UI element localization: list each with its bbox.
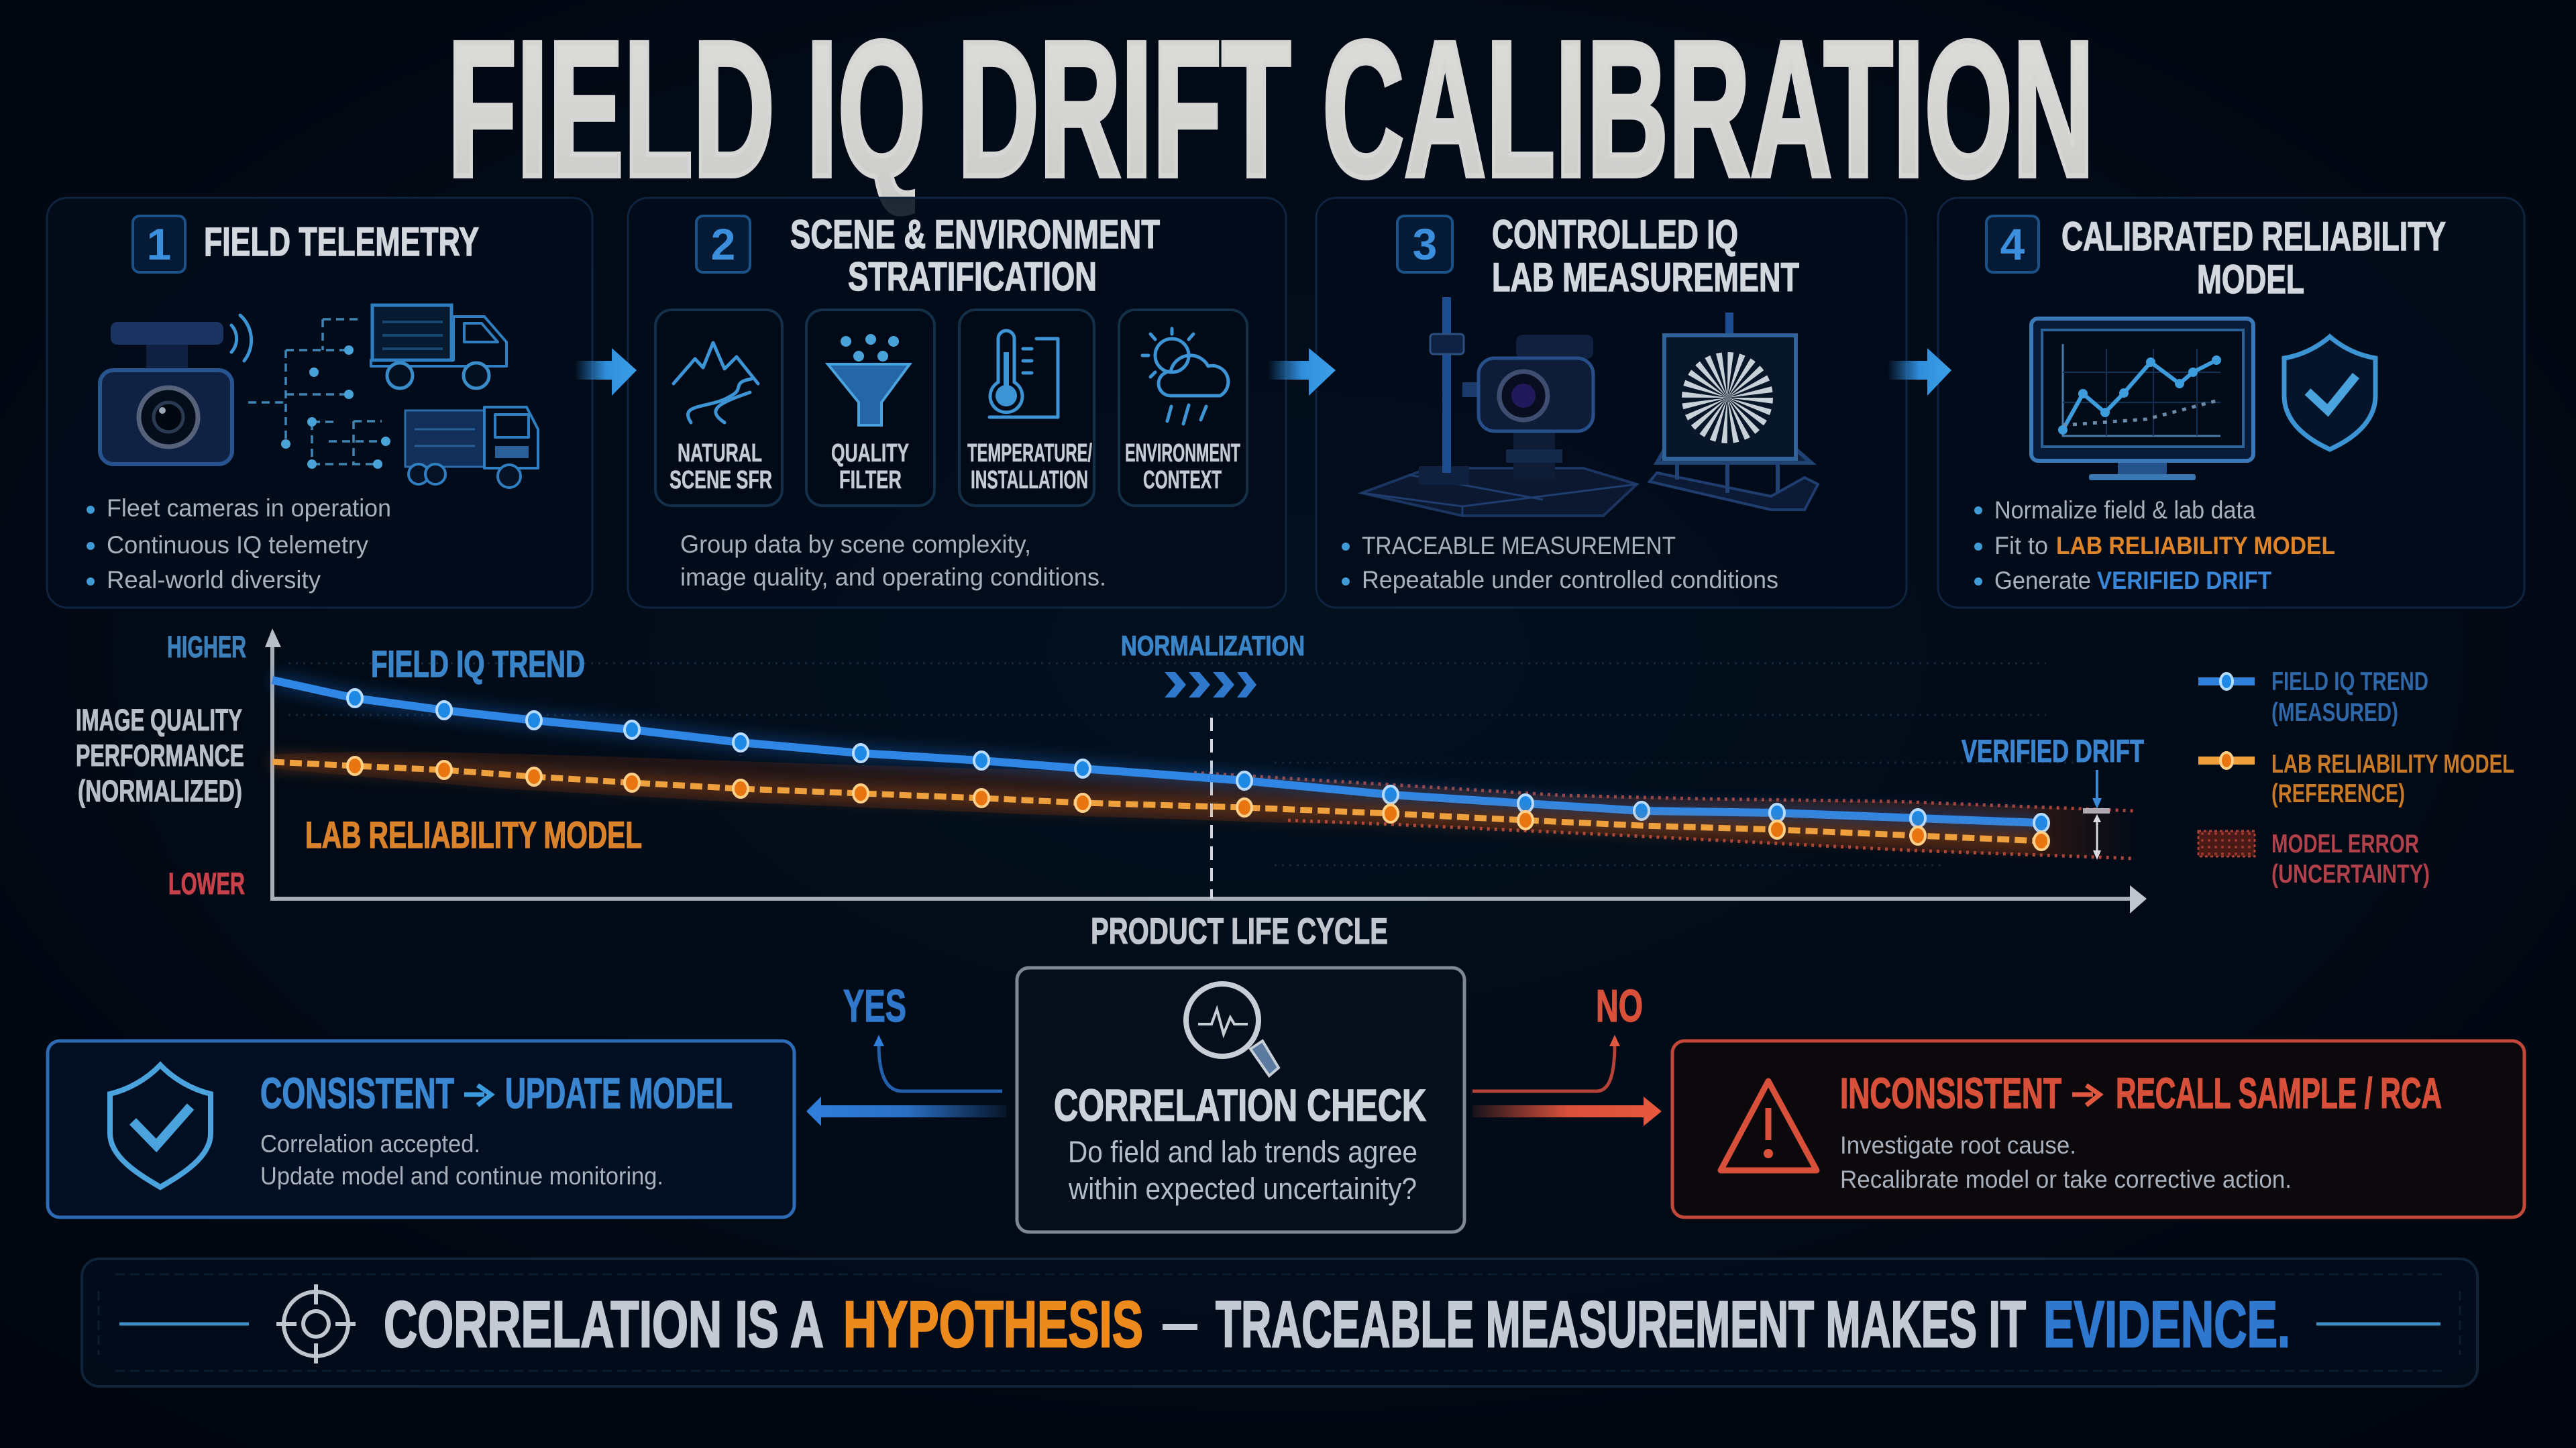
step badge 4: [1986, 216, 2039, 272]
label: yes: YES: [843, 981, 906, 1032]
series label: field IQ trend: FIELD IQ TREND: [371, 643, 585, 685]
callout: verified drift: VERIFIED DRIFT: [1962, 733, 2144, 769]
inconsistent heading: INCONSISTENT: [1840, 1069, 2061, 1117]
bullet list: TRACEABLE MEASUREMENT: [1362, 532, 1676, 559]
panel: scene and environment stratification: [628, 198, 1286, 608]
card: natural scene SFR: [655, 310, 782, 506]
icon: delivery truck: [371, 305, 506, 388]
consistent description: [260, 1130, 663, 1190]
arrow: step 1 to 2: [575, 348, 637, 396]
banner statement: TRACEABLE MEASUREMENT MAKES IT: [1216, 1288, 2026, 1361]
bullet list: Fit to: [1994, 532, 2048, 559]
step badge 1: [133, 216, 185, 272]
icon: resolution target: [1650, 313, 1818, 510]
decision: correlation check: [1017, 968, 1464, 1232]
label: no: NO: [1596, 981, 1643, 1032]
panel: calibrated reliability model: [1938, 198, 2524, 608]
banner statement: HYPOTHESIS: [843, 1288, 1143, 1361]
bullet list: [1342, 532, 1778, 594]
y axis labels: [76, 630, 246, 901]
icon: shield check: [110, 1065, 211, 1187]
consistent description: Update model and continue monitoring.: [260, 1162, 663, 1190]
description text: Group data by scene complexity,: [680, 531, 1031, 558]
normalization label and chevrons: NORMALIZATION: [1121, 630, 1305, 661]
right rule: [2316, 1323, 2440, 1325]
step badge 2: 2: [711, 219, 735, 269]
card: environment context: ENVIRONMENT: [1125, 439, 1240, 467]
card: temperature and installation: [959, 310, 1094, 506]
decision heading: CORRELATION CHECK: [1054, 1080, 1426, 1131]
legend: model error: MODEL ERROR: [2271, 830, 2419, 858]
y axis labels: (NORMALIZED): [78, 774, 242, 808]
arrow: step 2 to 3: [1268, 348, 1336, 396]
legend: lab reliability model: [2198, 750, 2514, 808]
axis title: product life cycle: PRODUCT LIFE CYCLE: [1091, 910, 1388, 952]
legend: field IQ trend: FIELD IQ TREND: [2271, 667, 2428, 696]
icon: dash camera: [100, 315, 252, 464]
arrow: no branch up: [1472, 1035, 1620, 1091]
arrow: step 3 to 4: [1888, 348, 1951, 396]
bullet list: [87, 494, 391, 594]
normalization divider: [1210, 718, 1213, 899]
heading: field telemetry: FIELD TELEMETRY: [204, 219, 479, 264]
bullet list: VERIFIED DRIFT: [2097, 567, 2271, 594]
heading: reliability model: MODEL: [2197, 257, 2304, 302]
card: temperature and installation: INSTALLATION: [971, 466, 1088, 494]
step badge 2: [696, 216, 750, 272]
bullet list: Repeatable under controlled conditions: [1362, 566, 1778, 594]
inconsistent description: Recalibrate model or take corrective action.: [1840, 1166, 2292, 1193]
card: quality filter: QUALITY: [831, 439, 909, 467]
heading: reliability model: [2061, 214, 2446, 302]
field IQ trend line: [272, 680, 2049, 832]
bullet list: Fleet cameras in operation: [107, 494, 391, 522]
y axis labels: IMAGE QUALITY: [76, 703, 242, 737]
legend: [2198, 667, 2514, 889]
consistent heading: UPDATE MODEL: [505, 1069, 733, 1117]
description text: image quality, and operating conditions.: [680, 563, 1106, 591]
icon: camera on test bench: [1362, 297, 1637, 516]
heading: stratification: SCENE & ENVIRONMENT: [790, 212, 1160, 257]
heading: lab measurement: [1492, 212, 1799, 300]
heading: lab measurement: LAB MEASUREMENT: [1492, 255, 1799, 300]
lab reliability model line: [272, 757, 2049, 850]
step badge 4: 4: [2000, 219, 2025, 269]
normalization label and chevrons: [1121, 630, 1305, 698]
card: natural scene SFR: SCENE SFR: [669, 466, 772, 494]
step badge 3: 3: [1413, 219, 1437, 269]
decision question: within expected uncertainity?: [1068, 1172, 1417, 1206]
y axis labels: PERFORMANCE: [76, 738, 244, 773]
card: natural scene SFR: NATURAL: [678, 439, 762, 467]
heading: stratification: [790, 212, 1160, 299]
outcome: inconsistent: [1672, 1041, 2524, 1217]
bullet list: Real-world diversity: [107, 566, 321, 594]
bullet list: [1974, 496, 2335, 594]
icon: connection network: [248, 319, 390, 469]
legend: field IQ trend: [2198, 667, 2428, 727]
axes: [265, 628, 2147, 913]
icon: monitor with chart: [2031, 319, 2253, 480]
heading: reliability model: CALIBRATED RELIABILITY: [2061, 214, 2446, 259]
legend: model error: [2198, 830, 2430, 889]
card: environment context: CONTEXT: [1143, 466, 1222, 494]
icon: target reticle: [276, 1284, 356, 1363]
step badge 3: [1397, 216, 1452, 272]
consistent heading: CONSISTENT: [260, 1069, 454, 1117]
series label: lab reliability model: LAB RELIABILITY MODEL: [305, 814, 642, 856]
icon: magnifier with pulse: [1186, 984, 1279, 1076]
arrow: yes branch up: [873, 1035, 1002, 1091]
banner statement: [384, 1288, 2290, 1361]
card: quality filter: FILTER: [839, 466, 902, 494]
heading: lab measurement: CONTROLLED IQ: [1492, 212, 1738, 257]
card: environment context: [1119, 310, 1247, 506]
banner statement: EVIDENCE.: [2043, 1288, 2290, 1361]
step badge 1: 1: [147, 219, 171, 269]
y axis labels: HIGHER: [167, 630, 246, 664]
arrow: yes to consistent: [806, 1097, 1006, 1126]
inconsistent description: Investigate root cause.: [1840, 1131, 2076, 1159]
outcome: consistent: [48, 1041, 794, 1217]
consistent description: Correlation accepted.: [260, 1130, 480, 1158]
legend: model error: (UNCERTAINTY): [2271, 860, 2430, 889]
icon: warning triangle: [1721, 1081, 1817, 1170]
bullet list: Generate: [1994, 567, 2091, 594]
icon: semi truck: [405, 407, 538, 488]
left rule: [119, 1323, 249, 1325]
bullet list: Continuous IQ telemetry: [107, 531, 368, 559]
panel: controlled IQ lab measurement: [1316, 198, 1907, 608]
heading: stratification: STRATIFICATION: [848, 254, 1097, 299]
callout: verified drift: [1962, 733, 2144, 860]
legend: field IQ trend: (MEASURED): [2271, 698, 2398, 727]
bullet list: LAB RELIABILITY MODEL: [2056, 532, 2335, 559]
bullet list: Normalize field & lab data: [1994, 496, 2255, 524]
decision question: Do field and lab trends agree: [1068, 1135, 1417, 1169]
consistent heading: [260, 1069, 733, 1117]
decision question: [1068, 1135, 1417, 1206]
line chart: field IQ vs lab model: [76, 628, 2147, 952]
banner statement: CORRELATION IS A: [384, 1288, 824, 1361]
arrow: no to inconsistent: [1472, 1097, 1662, 1126]
description text: [680, 531, 1106, 591]
inconsistent heading: [1840, 1069, 2442, 1117]
card: temperature and installation: TEMPERATURE/: [967, 439, 1092, 467]
uncertainty band: [272, 752, 2134, 858]
inconsistent description: [1840, 1131, 2292, 1193]
card: quality filter: [806, 310, 934, 506]
y axis labels: LOWER: [168, 867, 245, 901]
icon: shield check: [2284, 337, 2375, 449]
banner: takeaway: [82, 1259, 2477, 1386]
panel: field telemetry: [47, 198, 592, 608]
legend: lab reliability model: (REFERENCE): [2271, 779, 2405, 808]
